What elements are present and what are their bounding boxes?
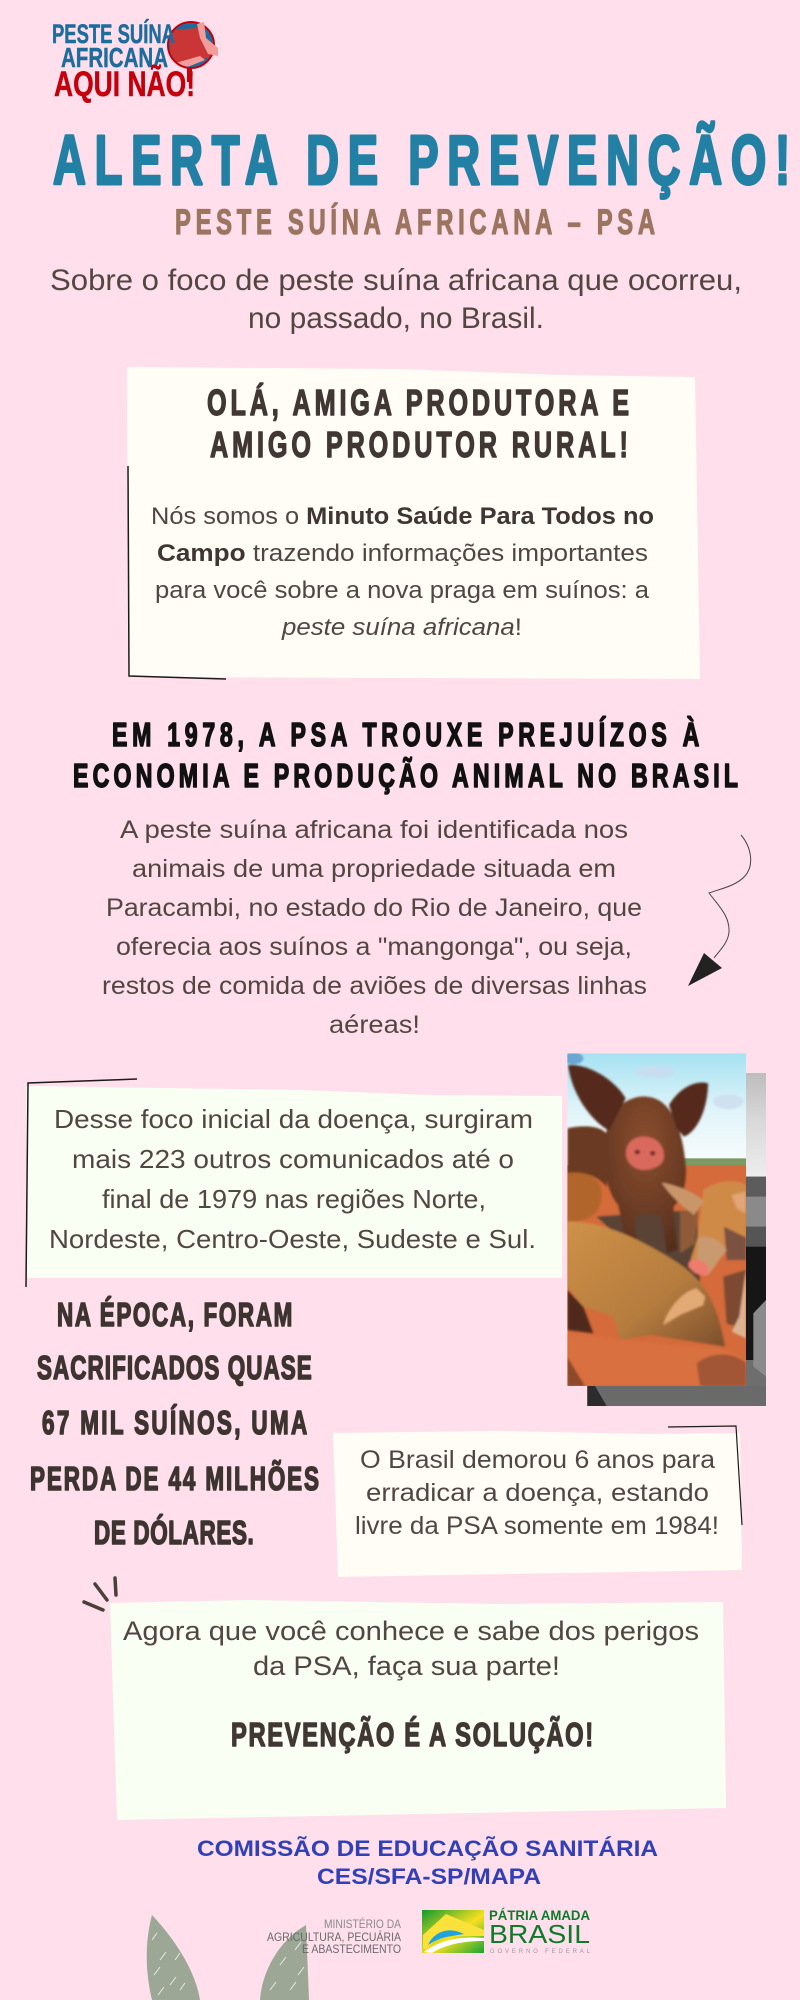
logo: Pátria Amada Brasil bbox=[422, 1907, 591, 1955]
paragraph: Paracambi: restos de comida de aviões de diversas linhas bbox=[102, 972, 647, 1000]
paragraph: Paracambi: A peste suína africana foi identificada nos bbox=[120, 816, 628, 844]
panel body text: Campo trazendo informações importantes bbox=[157, 540, 648, 567]
paragraph: Paracambi: Paracambi, no estado do Rio de Janeiro, que bbox=[106, 894, 642, 922]
panel text: da PSA, faça sua parte! bbox=[253, 1651, 560, 1681]
icon: magnifier with pig bbox=[165, 20, 218, 82]
grey offset photo backing bbox=[587, 1073, 766, 1406]
panel body text: Nós somos o Minuto Saúde Para Todos no bbox=[151, 503, 654, 530]
panel text: Desse foco inicial da doença, surgiram bbox=[54, 1104, 533, 1134]
panel body text bbox=[151, 503, 654, 641]
panel: eradication bbox=[333, 1426, 742, 1577]
callout: sacrificed animals: PERDA DE 44 MILHÕES bbox=[30, 1460, 319, 1497]
icon: flag bbox=[422, 1910, 484, 1953]
panel text bbox=[123, 1616, 699, 1681]
panel text bbox=[355, 1446, 719, 1540]
panel heading: OLÁ, AMIGA PRODUTORA E bbox=[207, 383, 629, 423]
panel body text: peste suína africana ! bbox=[281, 614, 522, 641]
section heading: 1978: ECONOMIA E PRODUÇÃO ANIMAL NO BRASIL bbox=[73, 758, 738, 795]
section heading: 1978 bbox=[73, 717, 738, 795]
credit heading bbox=[197, 1836, 658, 1889]
callout: sacrificed animals: SACRIFICADOS QUASE bbox=[37, 1349, 312, 1386]
logo: Pátria Amada Brasil: BRASIL bbox=[489, 1919, 590, 1949]
callout: sacrificed animals: DE DÓLARES. bbox=[94, 1514, 254, 1551]
section heading: 1978: EM 1978, A PSA TROUXE PREJUÍZOS À bbox=[112, 717, 699, 754]
panel text: livre da PSA somente em 1984! bbox=[355, 1512, 719, 1540]
logo: Pátria Amada Brasil: GOVERNO FEDERAL bbox=[490, 1949, 591, 1955]
panel text: final de 1979 nas regiões Norte, bbox=[102, 1184, 486, 1214]
credit heading: CES/SFA-SP/MAPA bbox=[317, 1864, 541, 1889]
callout: sacrificed animals: NA ÉPOCA, FORAM bbox=[57, 1296, 292, 1333]
panel text: Agora que você conhece e sabe dos perigos bbox=[123, 1616, 699, 1646]
logo: Peste Suína Africana Aqui Não: PESTE SUÍNA bbox=[52, 18, 175, 49]
panel body text: para você sobre a nova praga em suínos: a bbox=[155, 577, 650, 604]
ministry text bbox=[267, 1916, 401, 1956]
panel text: mais 223 outros comunicados até o bbox=[72, 1144, 514, 1174]
photo: pigs bbox=[563, 1052, 766, 1406]
decoration: leaves bbox=[147, 1915, 309, 2000]
panel heading: AMIGO PRODUTOR RURAL! bbox=[210, 425, 628, 465]
panel text bbox=[49, 1104, 536, 1254]
ministry text: MINISTÉRIO DA bbox=[324, 1916, 401, 1931]
panel text: Nordeste, Centro-Oeste, Sudeste e Sul. bbox=[49, 1224, 536, 1254]
arrow bbox=[688, 835, 751, 986]
intro text: Sobre o foco de peste suína africana que ocorreu, bbox=[50, 264, 742, 297]
icon: sparks bbox=[84, 1578, 116, 1610]
intro text: no passado, no Brasil. bbox=[248, 302, 544, 335]
subtitle: PESTE SUÍNA AFRICANA – PSA bbox=[175, 202, 655, 242]
panel: call to action bbox=[110, 1600, 726, 1820]
intro text bbox=[50, 264, 742, 335]
callout: sacrificed animals bbox=[30, 1296, 319, 1551]
logo: Pátria Amada Brasil: PÁTRIA AMADA bbox=[489, 1907, 590, 1923]
paragraph: Paracambi bbox=[102, 816, 647, 1039]
ministry text: AGRICULTURA, PECUÁRIA bbox=[267, 1929, 401, 1944]
paragraph: Paracambi: aéreas! bbox=[329, 1011, 420, 1039]
ministry text: E ABASTECIMENTO bbox=[302, 1942, 401, 1956]
logo: Peste Suína Africana Aqui Não bbox=[52, 18, 218, 104]
panel text: erradicar a doença, estando bbox=[366, 1479, 709, 1507]
panel: initial outbreak bbox=[26, 1079, 562, 1287]
logo: Peste Suína Africana Aqui Não: AQUI NÃO! bbox=[54, 65, 195, 104]
paragraph: Paracambi: animais de uma propriedade situada em bbox=[132, 855, 616, 883]
panel slogan: PREVENÇÃO É A SOLUÇÃO! bbox=[231, 1715, 593, 1754]
panel text: O Brasil demorou 6 anos para bbox=[360, 1446, 715, 1474]
logo: Peste Suína Africana Aqui Não: AFRICANA bbox=[61, 42, 168, 73]
panel: greeting bbox=[127, 367, 700, 679]
panel heading bbox=[207, 383, 629, 465]
title: ALERTA DE PREVENÇÃO! bbox=[53, 121, 790, 199]
credit heading: COMISSÃO DE EDUCAÇÃO SANITÁRIA bbox=[197, 1836, 658, 1861]
colour photo bbox=[563, 1052, 746, 1386]
paragraph: Paracambi: oferecia aos suínos a "mangonga", ou seja, bbox=[116, 933, 632, 961]
callout: sacrificed animals: 67 MIL SUÍNOS, UMA bbox=[42, 1404, 307, 1441]
